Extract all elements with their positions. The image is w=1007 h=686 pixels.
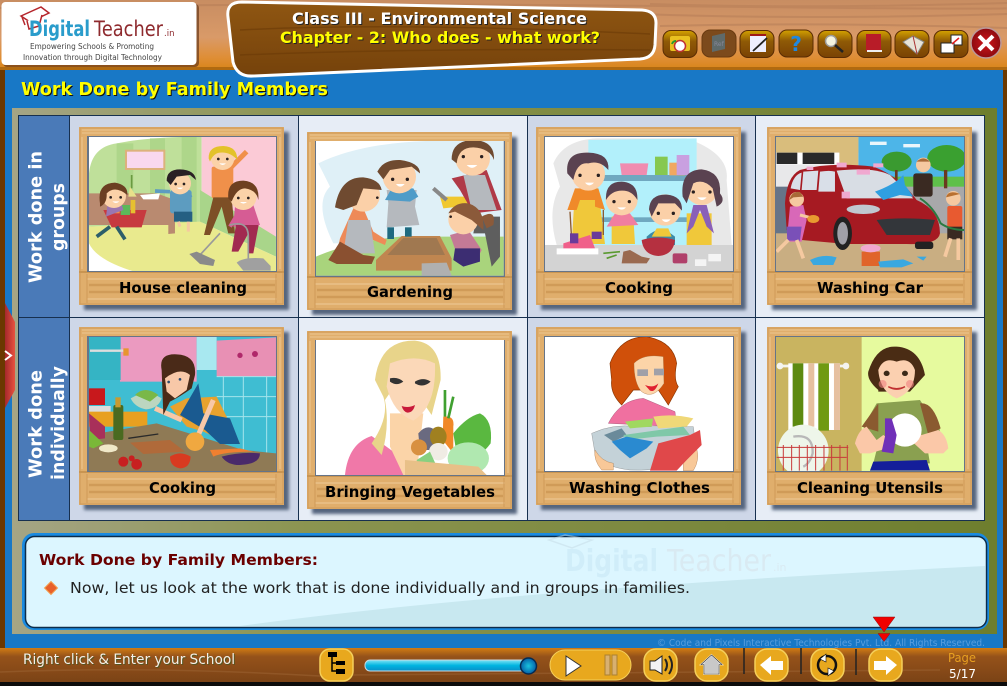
card: gardening	[307, 132, 517, 315]
page counter: 5/17	[949, 666, 976, 681]
watermark logo	[549, 535, 787, 579]
work table	[18, 115, 985, 521]
info panel	[22, 533, 989, 630]
icon: dictionary	[857, 30, 891, 58]
caption: Washing Car	[817, 279, 924, 297]
icon: help	[779, 30, 813, 57]
left slide tab	[5, 303, 15, 408]
caption: Washing Clothes	[569, 479, 710, 497]
caption: Gardening	[367, 283, 453, 301]
picture frame	[79, 327, 289, 510]
page heading: Work Done by Family Members	[21, 79, 328, 100]
illustration: woman with vegetables	[316, 340, 505, 475]
top wood bar	[0, 0, 1007, 70]
card: bringing vegetables	[307, 331, 517, 514]
icon: reference book	[702, 30, 736, 57]
illustration: woman washing plate	[776, 337, 965, 477]
caption: Cooking	[605, 279, 673, 297]
icon: refresh	[811, 649, 844, 681]
icon: previous arrow	[755, 649, 788, 681]
page counter: Page	[948, 651, 976, 665]
illustration: family cleaning house	[88, 137, 277, 271]
info text: Now, let us look at the work that is done individually and in groups in families.	[70, 579, 690, 597]
picture frame	[767, 327, 977, 510]
icon: open book	[895, 30, 929, 58]
logo wordmark: .in	[164, 29, 174, 39]
picture frame	[307, 331, 517, 514]
toolbar separators	[744, 648, 856, 675]
card: cooking in group	[536, 127, 746, 310]
logo wordmark: Digital	[29, 17, 90, 41]
logo wordmark	[29, 17, 174, 41]
icon: notepad	[740, 30, 774, 58]
illustration: woman with laundry basin	[545, 337, 733, 472]
picture frame	[536, 327, 746, 510]
logo tagline	[23, 42, 162, 62]
picture frame	[536, 127, 746, 310]
icon: window resize	[934, 30, 968, 58]
red pointer marker	[873, 617, 895, 642]
icon: timer folder	[663, 30, 697, 58]
logo panel	[2, 2, 199, 67]
icon: help: ?	[790, 32, 802, 56]
chapter title: Chapter - 2: Who does - what work?	[280, 28, 600, 47]
progress slider	[365, 658, 536, 674]
icon: close	[971, 28, 1001, 58]
illustration: family gardening	[316, 140, 504, 276]
logo tagline: Empowering Schools & Promoting	[30, 42, 154, 51]
caption: House cleaning	[119, 279, 247, 297]
watermark logo: Teacher	[666, 544, 772, 579]
icon: graduation cap	[21, 7, 49, 29]
bottom wood bar	[0, 648, 1007, 686]
watermark logo: Digital	[565, 544, 658, 579]
footer school text: Right click & Enter your School	[23, 652, 235, 668]
logo wordmark: Teacher	[93, 17, 163, 41]
icon: magnifier	[818, 30, 852, 58]
row label: work done individually: Work done	[26, 370, 46, 478]
row label: work done in groups: Work done in	[26, 151, 46, 283]
card: washing clothes	[536, 327, 746, 510]
chapter title banner	[228, 2, 656, 76]
watermark logo: .in	[773, 561, 787, 574]
left brown edge	[0, 66, 5, 650]
icon: outline tree	[320, 649, 353, 681]
icon: home	[695, 649, 728, 681]
illustration: family washing car	[776, 137, 966, 272]
right brown edge	[1003, 66, 1007, 650]
illustration: family cooking	[545, 137, 733, 272]
play pause control	[550, 650, 631, 680]
logo tagline: Innovation through Digital Technology	[23, 53, 162, 62]
card: house cleaning	[79, 127, 289, 310]
caption: Cooking	[149, 479, 216, 497]
row label: work done individually: individually	[48, 366, 69, 480]
caption: Bringing Vegetables	[325, 483, 495, 501]
copyright: © Code and Pixels Interactive Technologies Pvt. Ltd. All Rights Reserved.	[657, 638, 985, 649]
row label: work done individually	[26, 366, 69, 480]
row label: work done in groups	[26, 151, 69, 283]
page counter	[948, 651, 976, 681]
row label: work done in groups: groups	[48, 183, 69, 251]
icon: speaker	[644, 649, 677, 681]
table cells	[18, 115, 985, 521]
card: cooking individually	[79, 327, 289, 510]
icon: next arrow	[869, 649, 902, 681]
picture frame	[79, 127, 289, 310]
picture frame	[307, 132, 517, 315]
content panel background	[12, 108, 997, 634]
class title: Class III - Environmental Science	[292, 9, 587, 28]
toolbar icons	[663, 28, 1001, 58]
card: washing car	[767, 127, 977, 310]
info heading: Work Done by Family Members:	[39, 551, 318, 569]
icon: reference book: Ref	[714, 41, 725, 48]
caption: Cleaning Utensils	[797, 479, 943, 497]
icon: bullet diamond	[44, 582, 58, 594]
illustration: woman cooking	[89, 337, 276, 472]
card: cleaning utensils	[767, 327, 977, 510]
picture frame	[767, 127, 977, 310]
